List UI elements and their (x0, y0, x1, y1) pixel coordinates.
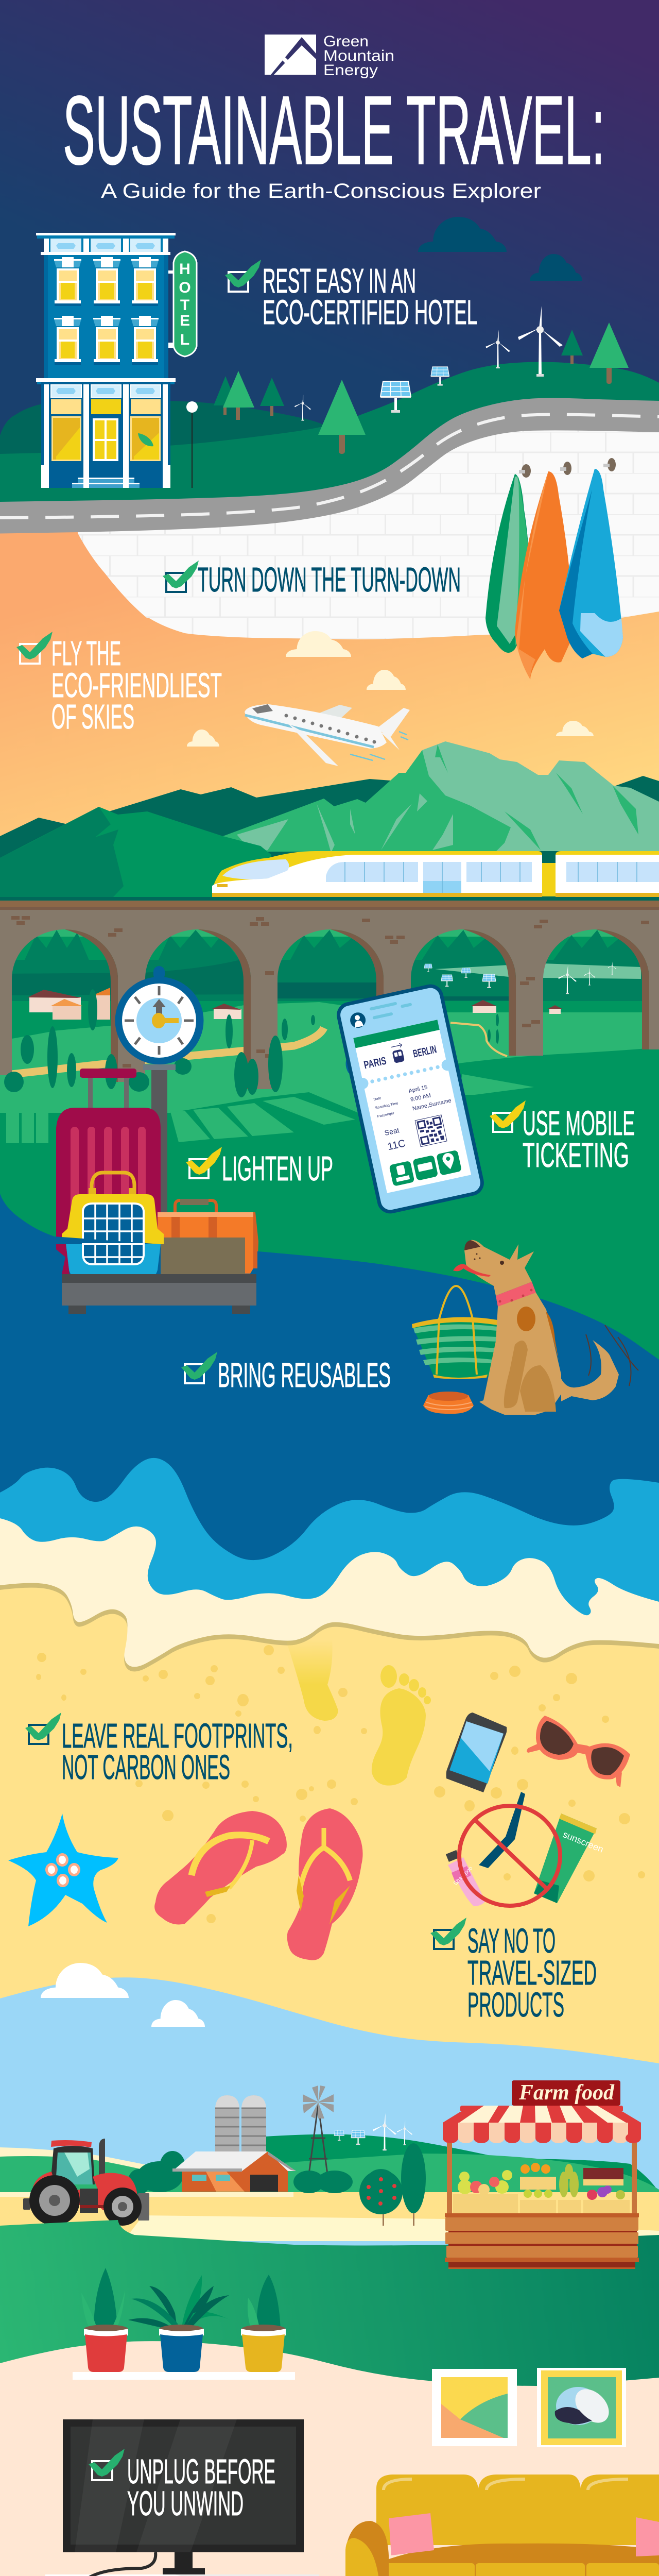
panel: deep blue water (0, 1194, 659, 1597)
panel: night sky header (0, 0, 659, 536)
barn (172, 2151, 296, 2192)
dog (453, 1240, 638, 1415)
hotel vertical sign: T (180, 297, 189, 314)
footprints in the sand (286, 1639, 431, 1786)
checklist item: leave real footprints: NOT CARBON ONES (62, 1748, 230, 1787)
yellow sofa (345, 2475, 659, 2576)
bushes behind barn (128, 2151, 353, 2195)
mobile phone with boarding pass: Passenger (377, 1111, 395, 1118)
farm food stand: Farm food (518, 2081, 615, 2105)
television (63, 2419, 304, 2574)
sand specks (36, 1645, 645, 1923)
station clock (115, 966, 204, 1214)
checklist item: rest easy: ECO-CERTIFIED HOTEL (263, 293, 477, 332)
checklist item: leave real footprints: LEAVE REAL FOOTPRINTS, (62, 1717, 293, 1755)
checklist item: lighten up: LIGHTEN UP (222, 1149, 333, 1188)
red tractor (23, 2139, 149, 2226)
shallow water waves (0, 1458, 659, 1623)
panel: living room wall (0, 2341, 659, 2576)
mobile phone with boarding pass: PARIS (363, 1055, 388, 1071)
mountains (0, 741, 659, 907)
checklist item: fly the eco-friendliest of skies: ECO-FRIENDLIEST (51, 666, 222, 705)
dark clouds (418, 217, 582, 281)
checklist item: unplug before you unwind: UNPLUG BEFORE (127, 2452, 275, 2491)
potted plants on a shelf (73, 2268, 295, 2380)
redraw stand counter over hill (445, 2232, 639, 2269)
pet carrier (62, 1173, 164, 1278)
orange duffel bag (158, 1199, 258, 1274)
hotel vertical sign: E (180, 312, 190, 329)
winding road (0, 398, 659, 534)
tv power cord and plug (57, 2552, 155, 2576)
logo: Green Mountain Energy: Energy (323, 62, 378, 79)
checklist item: leave real footprints (25, 1713, 293, 1787)
flip-flops (154, 1808, 363, 1960)
checklist item: say no to travel-sized products: PRODUCTS (467, 1986, 564, 2024)
distant solar panels (424, 964, 496, 988)
checklist item: unplug before you unwind (89, 2449, 275, 2523)
starfish (8, 1814, 118, 1926)
hills behind the hotel (0, 362, 659, 536)
tv cabinet (45, 2574, 319, 2576)
subtitle: A Guide for the Earth-Conscious Explorer (101, 180, 541, 202)
dog bowl (423, 1392, 474, 1414)
mobile phone with boarding pass: 11C (387, 1138, 407, 1153)
checklist item: unplug before you unwind: YOU UNWIND (127, 2484, 244, 2523)
viaduct bridge (0, 901, 659, 1089)
panel: peach sky with mountains (0, 531, 659, 912)
checklist item: say no to travel-sized products (430, 1918, 597, 2024)
solar panels on the hill (380, 367, 449, 413)
panel: sandy beach (0, 1588, 659, 2117)
farm hills and fields (0, 2134, 659, 2241)
logo: Green Mountain Energy (265, 33, 394, 79)
no travel-sized products sign (446, 1792, 605, 1906)
windmill (303, 2086, 334, 2174)
hotel vertical sign (168, 251, 197, 357)
landscape under the viaduct (0, 910, 659, 1363)
pine trees (214, 323, 629, 454)
mobile phone with boarding pass: BERLIN (412, 1043, 438, 1060)
train (212, 851, 659, 897)
checklist item: fly the eco-friendliest of skies: FLY THE (51, 634, 121, 673)
white clouds over farm (41, 1963, 205, 2027)
checklist item: bring reusables: BRING REUSABLES (218, 1356, 391, 1395)
distant wind turbines (558, 961, 616, 994)
checklist item: turn down the turn-down (163, 561, 461, 599)
framed art: abstract shapes (537, 2368, 626, 2447)
street lamp (186, 401, 198, 488)
cream clouds (187, 631, 594, 747)
cypress trees (4, 989, 499, 1097)
checklist item: rest easy (225, 260, 477, 332)
tote bag (412, 1286, 497, 1379)
no travel-sized products sign: Shampoo (453, 1865, 474, 1887)
mobile phone with boarding pass: Seat (384, 1126, 400, 1137)
houses in the arches (27, 988, 562, 1020)
red suitcase (56, 1069, 161, 1254)
hotel vertical sign: L (180, 331, 189, 348)
logo: Green Mountain Energy: Mountain (323, 47, 394, 64)
checklist item: lighten up (186, 1147, 333, 1188)
no travel-sized products sign: sunscreen (562, 1829, 605, 1855)
checklist item: fly the eco-friendliest of skies: OF SKIES (51, 698, 134, 736)
mobile phone with boarding pass: Boarding Time (375, 1101, 398, 1110)
mobile phone with boarding pass: 9:00 AM (410, 1092, 431, 1103)
silos (215, 2095, 266, 2151)
mobile phone with boarding pass (332, 984, 484, 1215)
mobile phone with boarding pass: Name,Surname (412, 1097, 452, 1112)
wind turbines on the hill (294, 306, 563, 421)
panel: daytime farm sky (0, 1977, 659, 2267)
solar panels and turbines on farm hill (334, 2113, 412, 2150)
sunglasses (527, 1716, 630, 1787)
checklist item: say no to travel-sized products: SAY NO TO (467, 1922, 556, 1960)
checklist item: use mobile ticketing (490, 1100, 635, 1175)
mobile phone with boarding pass: Date (373, 1096, 381, 1101)
panel: green hillside (0, 2220, 659, 2401)
hotel building (36, 233, 176, 488)
wet sand edge (0, 1583, 659, 2112)
redraw luggage base over water (56, 1244, 257, 1314)
framed art: abstract landscape (432, 2369, 517, 2446)
panel: white tiled bathroom wall (78, 417, 659, 639)
airplane (245, 704, 410, 766)
towels on hooks (485, 458, 623, 680)
hotel vertical sign: H (179, 261, 190, 278)
orchard trees (359, 2143, 426, 2226)
luggage scale (62, 1257, 256, 1314)
hotel vertical sign: O (179, 279, 191, 296)
smartphone on the sand (446, 1713, 507, 1792)
checklist item: bring reusables (181, 1352, 391, 1395)
checklist item: rest easy: REST EASY IN AN (263, 262, 416, 300)
logo: Green Mountain Energy: Green (323, 33, 369, 50)
checklist item: fly the eco-friendliest of skies (16, 632, 222, 736)
sea foam (0, 1518, 659, 1700)
mobile phone with boarding pass: April 15 (408, 1084, 428, 1094)
farm food stand (443, 2080, 641, 2269)
